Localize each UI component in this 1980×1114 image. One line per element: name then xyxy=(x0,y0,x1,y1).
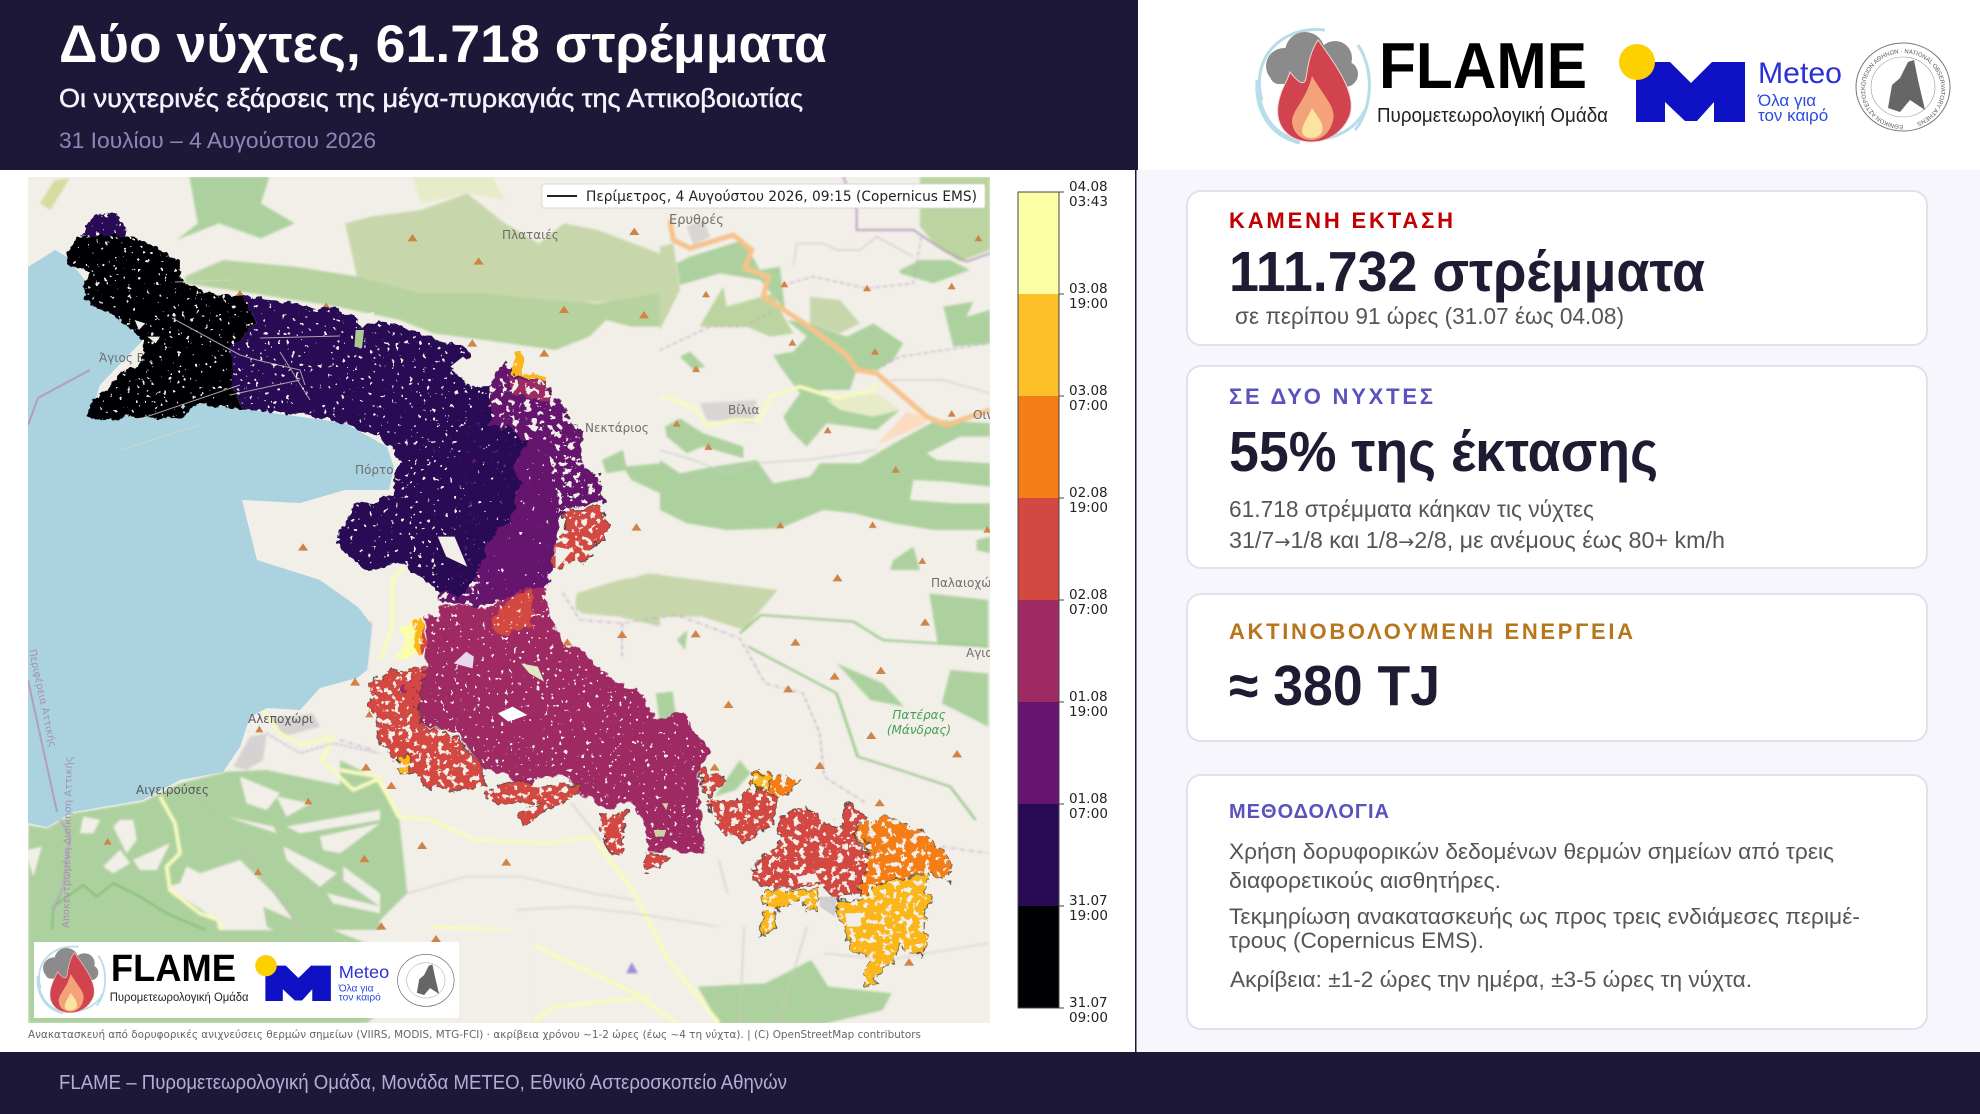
panel: methodology: τρους (Copernicus EMS). xyxy=(1229,928,1484,953)
colorbar: 04.08 xyxy=(1069,179,1108,195)
colorbar xyxy=(1018,179,1108,1026)
map: place labels: Αιγειρούσες xyxy=(136,783,209,797)
header logos xyxy=(1255,28,1950,144)
panel: methodology: ΜΕΘΟΔΟΛΟΓΙΑ xyxy=(1229,801,1389,823)
map: fire perimeter, later days xyxy=(369,507,952,987)
panel: two nights: 31/7→1/8 και 1/8→2/8, με ανέμους έως 80+ km/h xyxy=(1229,527,1725,553)
panel: map xyxy=(26,177,1003,1024)
panel: burned area: σε περίπου 91 ώρες (31.07 έως 04.08) xyxy=(1235,303,1624,329)
panel: burned area: 111.732 στρέμματα xyxy=(1229,240,1705,304)
panel: radiated energy xyxy=(1187,594,1927,741)
map: sea xyxy=(28,250,394,827)
map: fire perimeter, first night xyxy=(67,213,710,853)
panel: methodology: Χρήση δορυφορικών δεδομένων θερμών σημείων από τρεις xyxy=(1229,839,1834,864)
panel: burned area: ΚΑΜΕΝΗ ΕΚΤΑΣΗ xyxy=(1229,208,1453,233)
map: place labels xyxy=(26,213,1003,928)
map: place labels: Ερυθρές xyxy=(669,213,724,228)
small logo strip on map: Όλα για xyxy=(338,984,374,995)
colorbar: 03.08 xyxy=(1069,383,1108,399)
map: place labels: Αγια xyxy=(966,646,993,660)
colorbar: 03.08 xyxy=(1069,281,1108,297)
colorbar: 31.07 xyxy=(1069,893,1108,909)
map: place labels: Αποκεντρωμένη Διοίκηση Αττικής xyxy=(60,756,75,928)
header logos: Meteo xyxy=(1758,57,1842,90)
map: admin boundary xyxy=(28,370,90,812)
header logos: τον καιρό xyxy=(1758,106,1828,125)
colorbar: 31.07 xyxy=(1069,995,1108,1011)
map: place labels: Βίλια xyxy=(728,403,759,417)
small logo strip on map: Meteo xyxy=(339,962,389,982)
panel: two nights: ΣΕ ΔΥΟ ΝΥΧΤΕΣ xyxy=(1229,384,1433,409)
colorbar: 02.08 xyxy=(1069,587,1108,603)
header logos: FLAME xyxy=(1379,29,1587,102)
colorbar: 09:00 xyxy=(1069,1010,1108,1026)
header logos: Όλα για xyxy=(1757,91,1816,110)
map: inner roads through burn xyxy=(120,280,340,450)
map legend: Περίμετρος, 4 Αυγούστου 2026, 09:15 (Copernicus EMS) xyxy=(586,189,977,205)
header band xyxy=(0,0,1138,170)
map legend xyxy=(542,184,985,208)
header logos: ΕΘΝΙΚΟΝ ΑΣΤΕΡΟΣΚΟΠΕΙΟΝ ΑΘΗΝΩΝ · NATIONAL OBSERVATORY ATHENS xyxy=(1860,48,1946,130)
panel: methodology: διαφορετικούς αισθητήρες. xyxy=(1229,868,1501,893)
map: place labels: Αλεποχώρι xyxy=(248,712,313,726)
colorbar: 02.08 xyxy=(1069,485,1108,501)
map: place labels: (Μάνδρας) xyxy=(887,723,951,737)
small logo strip on map: FLAME xyxy=(111,947,236,990)
map: peaks xyxy=(104,228,991,966)
colorbar: 19:00 xyxy=(1069,500,1108,516)
panel: two nights: 55% της έκτασης xyxy=(1229,420,1658,484)
header band: 31 Ιουλίου – 4 Αυγούστου 2026 xyxy=(59,128,376,153)
panel: burned area xyxy=(1187,191,1927,345)
map: place labels: Πόρτο xyxy=(355,463,394,477)
panel: two nights xyxy=(1187,366,1927,568)
small logo strip on map: τον καιρό xyxy=(339,992,381,1003)
panel: methodology: Τεκμηρίωση ανακατασκευής ως προς τρεις ενδιάμεσες περιμέ- xyxy=(1229,904,1860,929)
colorbar: 01.08 xyxy=(1069,689,1108,705)
panel: two nights: 61.718 στρέμματα κάηκαν τις νύχτες xyxy=(1229,496,1594,522)
footer band xyxy=(0,1052,1980,1114)
map: place labels: Περιφέρεια Αττικής xyxy=(26,648,59,748)
map: place labels: Παλαιοχώρι xyxy=(931,576,1003,590)
small logo strip on map xyxy=(34,942,459,1018)
colorbar: 07:00 xyxy=(1069,602,1108,618)
map: place labels: Πλαταιές xyxy=(502,228,559,242)
colorbar: 01.08 xyxy=(1069,791,1108,807)
panel divider xyxy=(1135,170,1136,1052)
colorbar: 03:43 xyxy=(1069,194,1108,210)
small logo strip on map: Πυρομετεωρολογική Ομάδα xyxy=(110,990,249,1004)
map: unburned islands xyxy=(135,312,862,927)
colorbar: 07:00 xyxy=(1069,806,1108,822)
panel: methodology: Ακρίβεια: ±1-2 ώρες την ημέρα, ±3-5 ώρες τη νύχτα. xyxy=(1230,967,1752,992)
right panel background xyxy=(1136,170,1980,1052)
header band: Δύο νύχτες, 61.718 στρέμματα xyxy=(59,15,827,74)
footer band: FLAME – Πυρομετεωρολογική Ομάδα, Μονάδα METEO, Εθνικό Αστεροσκοπείο Αθηνών xyxy=(59,1072,787,1094)
map: place labels: Άγιος Βασ xyxy=(99,351,161,365)
header logos: Πυρομετεωρολογική Ομάδα xyxy=(1377,105,1608,127)
colorbar: 19:00 xyxy=(1069,908,1108,924)
map: place labels: Νεκτάριος xyxy=(585,421,649,435)
header band: Οι νυχτερινές εξάρσεις της μέγα-πυρκαγιάς της Αττικοβοιωτίας xyxy=(59,83,803,113)
colorbar: 19:00 xyxy=(1069,296,1108,312)
map: place labels: Πατέρας xyxy=(892,708,946,722)
panel: radiated energy: ΑΚΤΙΝΟΒΟΛΟΥΜΕΝΗ ΕΝΕΡΓΕΙΑ xyxy=(1229,619,1633,644)
map: place labels: Οιν xyxy=(973,408,994,422)
colorbar: 19:00 xyxy=(1069,704,1108,720)
panel: radiated energy: ≈ 380 TJ xyxy=(1229,654,1440,718)
map caption: Ανακατασκευή από δορυφορικές ανιχνεύσεις θερμών σημείων (VIIRS, MODIS, MTG-FCI) · ακρίβεια χρόνου ~1-2 ώρες (έως ~4 τη νύχτα). | (C) OpenStreetMap contributors xyxy=(28,1029,921,1041)
colorbar: 07:00 xyxy=(1069,398,1108,414)
map: fire perimeter, outer purple step xyxy=(438,360,604,607)
panel: methodology xyxy=(1187,775,1927,1029)
